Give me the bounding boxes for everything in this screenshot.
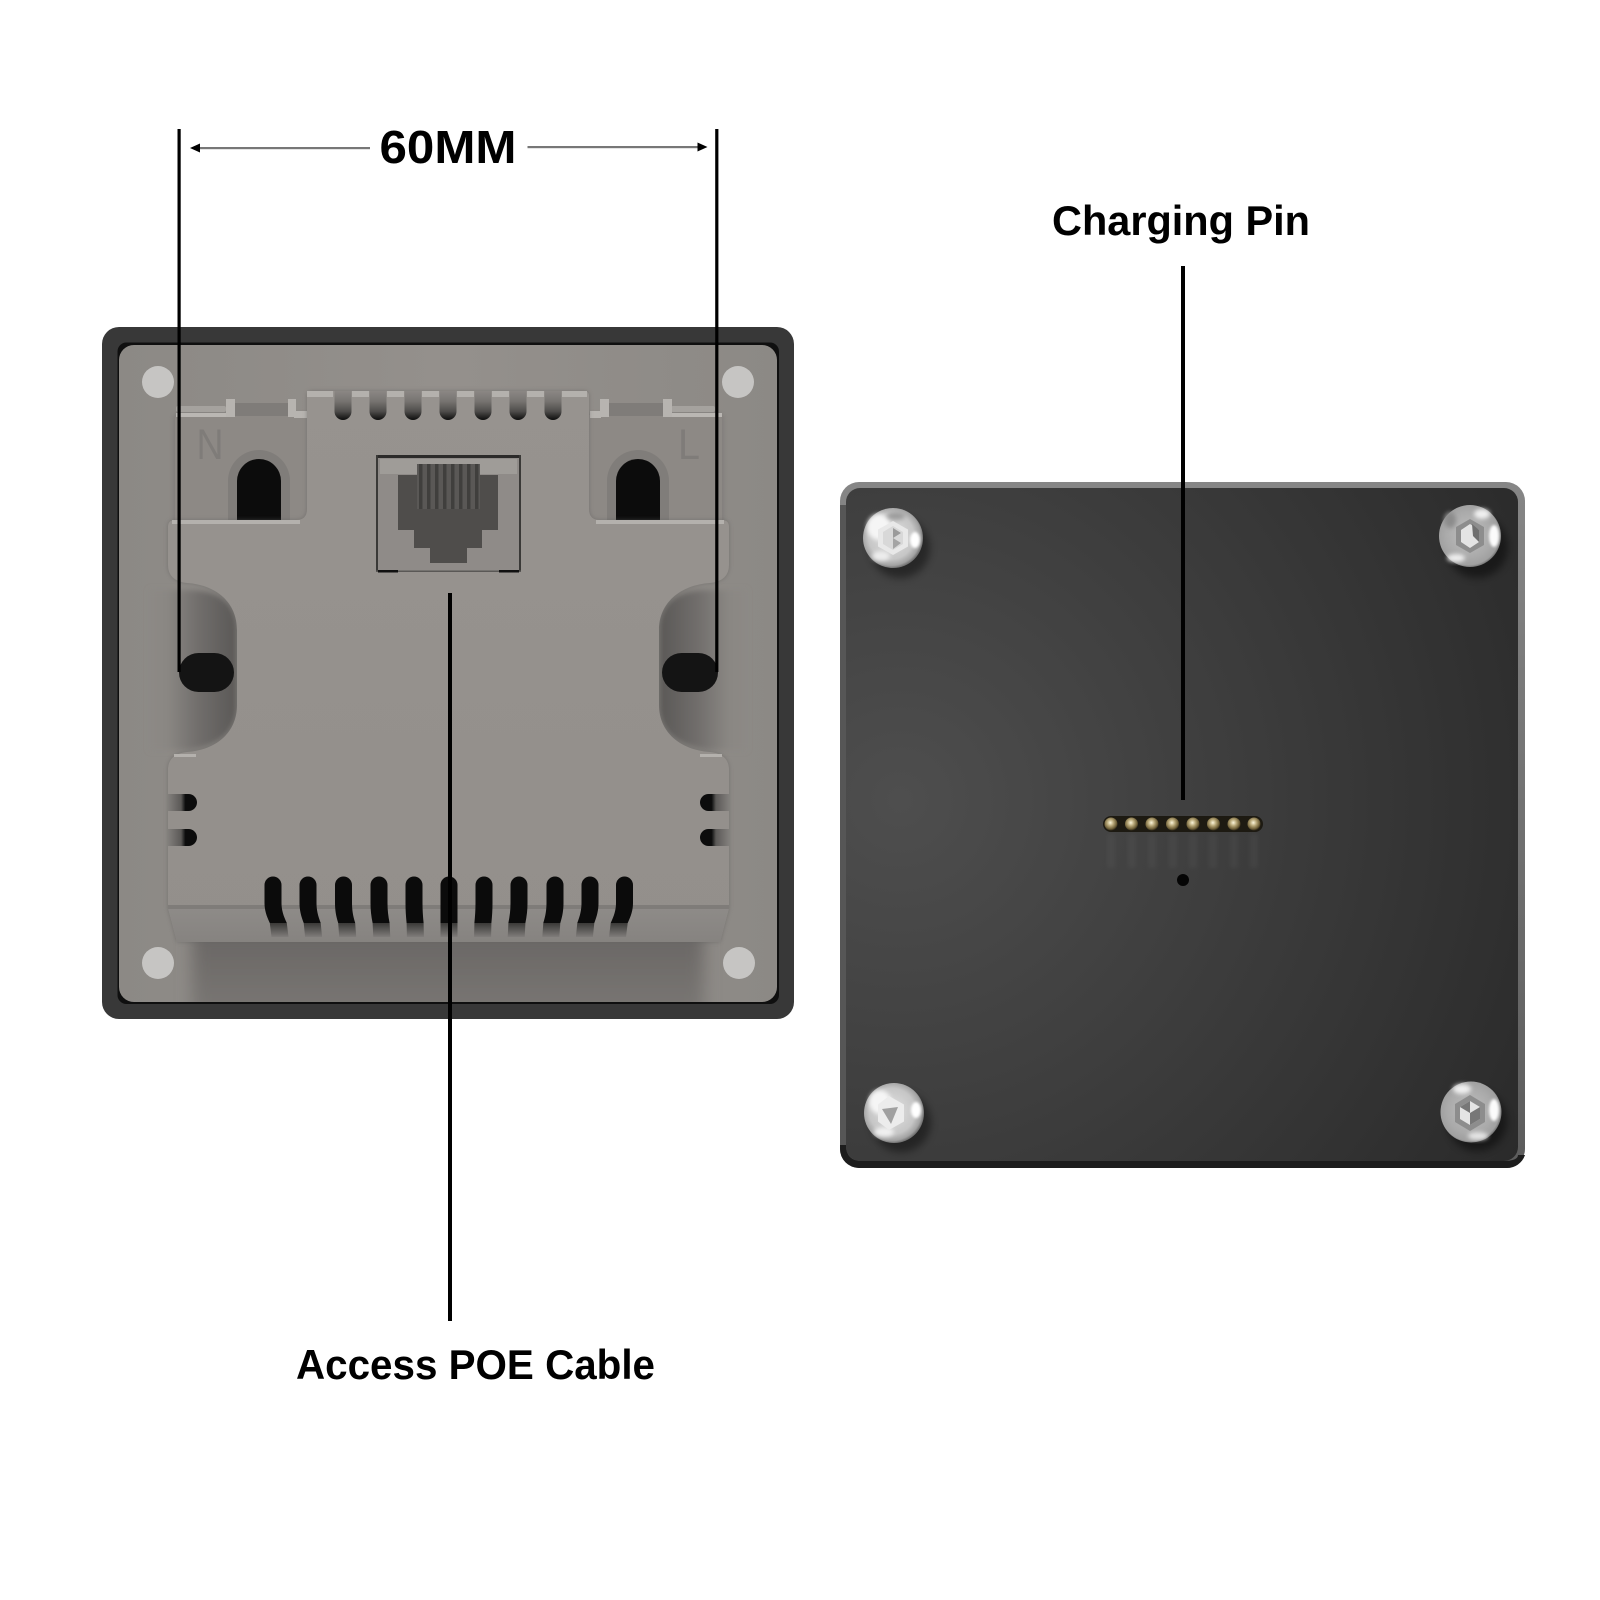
left terminal ear: N bbox=[196, 421, 224, 469]
pin reflections bbox=[1107, 834, 1258, 868]
grey back plate bbox=[119, 345, 777, 1002]
screw top left bbox=[863, 508, 930, 578]
RJ45 network port bbox=[376, 455, 521, 572]
left oval mounting hole bbox=[179, 653, 234, 692]
housing body bbox=[168, 391, 729, 942]
left side cut-out recess bbox=[150, 590, 237, 750]
outer dark frame bbox=[102, 327, 794, 1019]
right side slots bbox=[700, 794, 729, 846]
screw bottom right bbox=[1440, 1082, 1507, 1151]
right side cut-out recess bbox=[659, 590, 746, 750]
housing top highlights bbox=[172, 391, 724, 757]
bottom vent slots bbox=[264, 876, 633, 937]
label: Charging Pin: Charging Pin bbox=[1052, 197, 1310, 244]
top vent notches bbox=[334, 391, 562, 420]
inner recess shadow bbox=[118, 342, 779, 1004]
plate edge bevel bbox=[840, 482, 1525, 1168]
charging pin strip bbox=[1103, 816, 1263, 832]
left dimension line bbox=[178, 129, 181, 672]
left edge tint bbox=[840, 505, 846, 1145]
dark plate face bbox=[846, 488, 1518, 1161]
right terminal ear: L bbox=[678, 421, 700, 469]
arrow: 60mm right bbox=[528, 142, 708, 152]
left side slots bbox=[168, 794, 197, 846]
bottom dark edge bbox=[840, 1145, 1525, 1168]
right dimension line bbox=[715, 129, 718, 672]
screw bottom left bbox=[864, 1083, 931, 1152]
bottom bevelled lip bbox=[168, 905, 729, 942]
panel: module front plate with charging pins bbox=[840, 482, 1525, 1168]
right oval mounting hole bbox=[662, 653, 718, 692]
panel: module rear view bbox=[102, 327, 794, 1020]
screw top right bbox=[1439, 505, 1508, 578]
mounting dots bbox=[142, 366, 755, 979]
dimension label: 60MM bbox=[380, 121, 516, 173]
left terminal ear bbox=[173, 399, 315, 527]
label: Access POE Cable: Access POE Cable bbox=[296, 1341, 655, 1388]
right terminal ear bbox=[581, 399, 724, 527]
reset pinhole bbox=[1177, 874, 1189, 886]
leader line: charging pin bbox=[1181, 266, 1185, 800]
arrow: 60mm left bbox=[190, 144, 370, 152]
shadow below housing bbox=[186, 942, 710, 1002]
leader line: POE cable bbox=[448, 593, 452, 1321]
